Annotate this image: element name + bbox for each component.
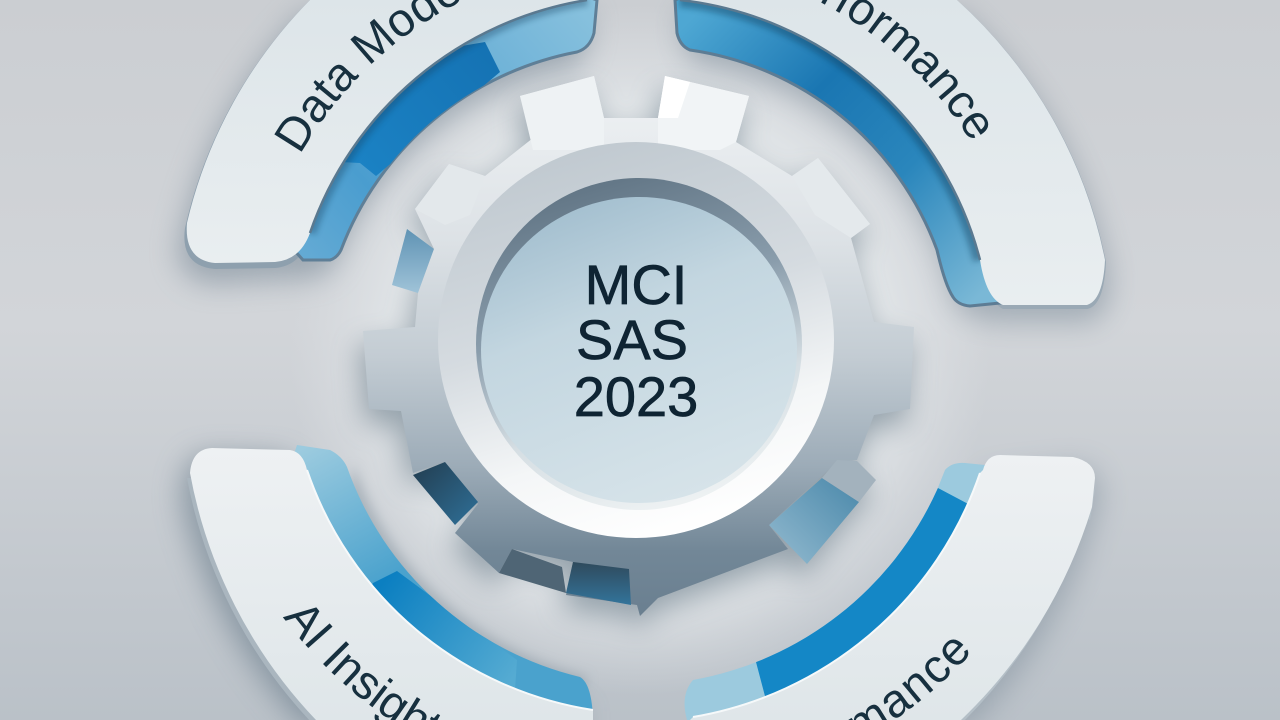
gear slot: lower right bbox=[769, 478, 859, 564]
card: AI Insights bbox=[190, 448, 593, 720]
gear inner ring bbox=[476, 178, 802, 510]
gear tooth highlight bbox=[415, 76, 876, 502]
title: MCI SAS 2023 bbox=[574, 253, 698, 428]
center disc bbox=[481, 197, 797, 503]
panel: Performance (top right) bbox=[670, 0, 1122, 335]
panel: Performance (bottom right) bbox=[684, 455, 1110, 720]
card: Performance bbox=[680, 0, 1105, 305]
band: Performance blue arc bbox=[675, 0, 1000, 306]
band: AI Insights blue arc bbox=[285, 445, 593, 720]
card: Performance (lower) bbox=[690, 455, 1095, 720]
panel: Data Modeling (top left) bbox=[166, 0, 601, 297]
gear slot: left bbox=[392, 229, 434, 293]
gear notch: bottom left bbox=[499, 549, 566, 593]
panel: AI Insights (bottom left) bbox=[168, 440, 594, 720]
title: MCI SAS 2023: 2023 bbox=[574, 365, 698, 428]
band: Performance blue arc (lower) bbox=[685, 463, 1010, 720]
gear body bbox=[363, 76, 914, 616]
gear slot: lower left bbox=[413, 462, 478, 525]
title: MCI SAS 2023: MCI bbox=[585, 253, 687, 316]
gear slot: bottom bbox=[566, 562, 631, 605]
title: MCI SAS 2023: SAS bbox=[576, 308, 688, 371]
card: Data Modeling bbox=[187, 0, 587, 263]
gear outer ring bbox=[438, 142, 834, 538]
band: Data Modeling blue arc bbox=[285, 0, 597, 260]
central gear bbox=[359, 76, 914, 630]
